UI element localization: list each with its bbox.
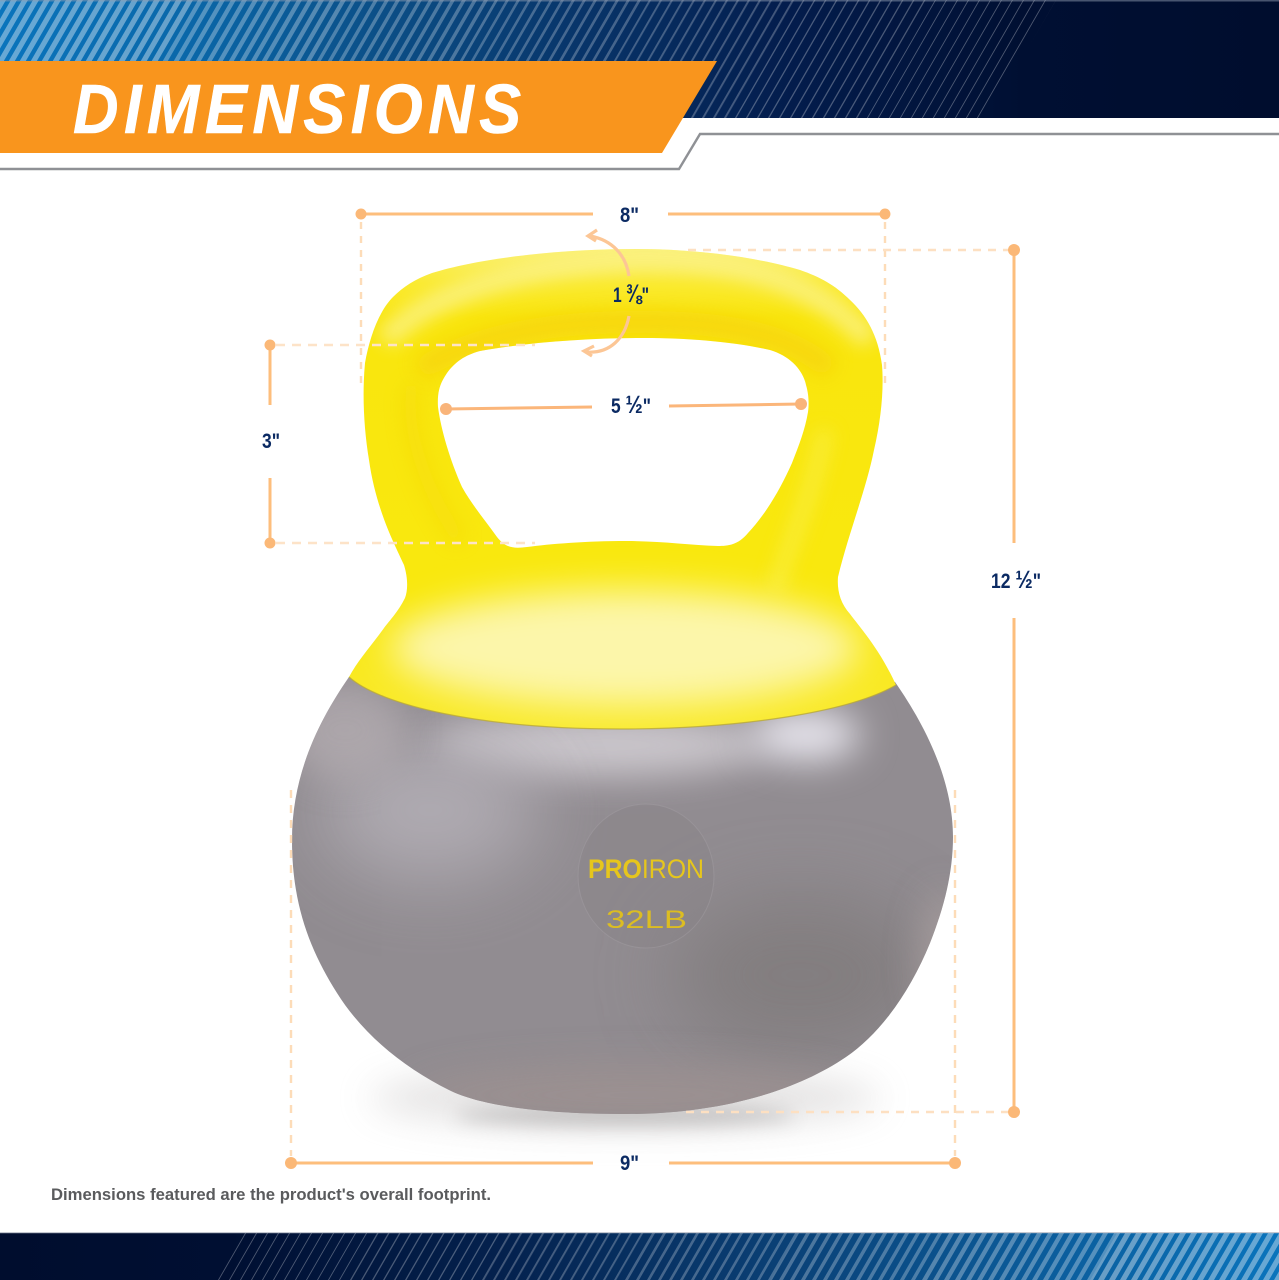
brand text: PROIRON — [588, 854, 704, 884]
header white notch with grey outline — [0, 118, 1279, 170]
dimension: handle thickness: 1 ⅜" — [613, 280, 649, 308]
dimension: grip height 3 inches: 3" — [262, 430, 280, 453]
dimension: handle thickness — [584, 230, 649, 356]
dimension: overall width 8 inches — [356, 204, 890, 385]
header band with diagonal stripes — [0, 0, 1279, 118]
yellow handle and cap — [340, 249, 910, 739]
dimension: overall width 8 inches: 8" — [620, 204, 639, 227]
dimension: base width 9 inches — [285, 790, 961, 1175]
footnote: Dimensions featured are the product's overall footprint. — [51, 1186, 491, 1204]
kettlebell body — [280, 249, 970, 1130]
grey ball — [292, 677, 953, 1114]
floor shadow — [370, 1068, 880, 1128]
title: DIMENSIONS — [73, 71, 521, 149]
dimension: grip width: 5 ½" — [611, 391, 651, 419]
title banner — [0, 61, 717, 153]
dimension: overall height: 12 ½" — [991, 566, 1041, 594]
dimension: base width 9 inches: 9" — [620, 1152, 639, 1175]
weight text: 32LB — [606, 906, 687, 934]
product label — [578, 804, 714, 948]
dimension: grip width — [440, 391, 807, 419]
cap seam — [349, 677, 896, 729]
dimension: overall height — [686, 244, 1041, 1118]
footer band with diagonal stripes — [0, 1232, 1279, 1280]
dimension: grip height 3 inches — [262, 340, 535, 548]
